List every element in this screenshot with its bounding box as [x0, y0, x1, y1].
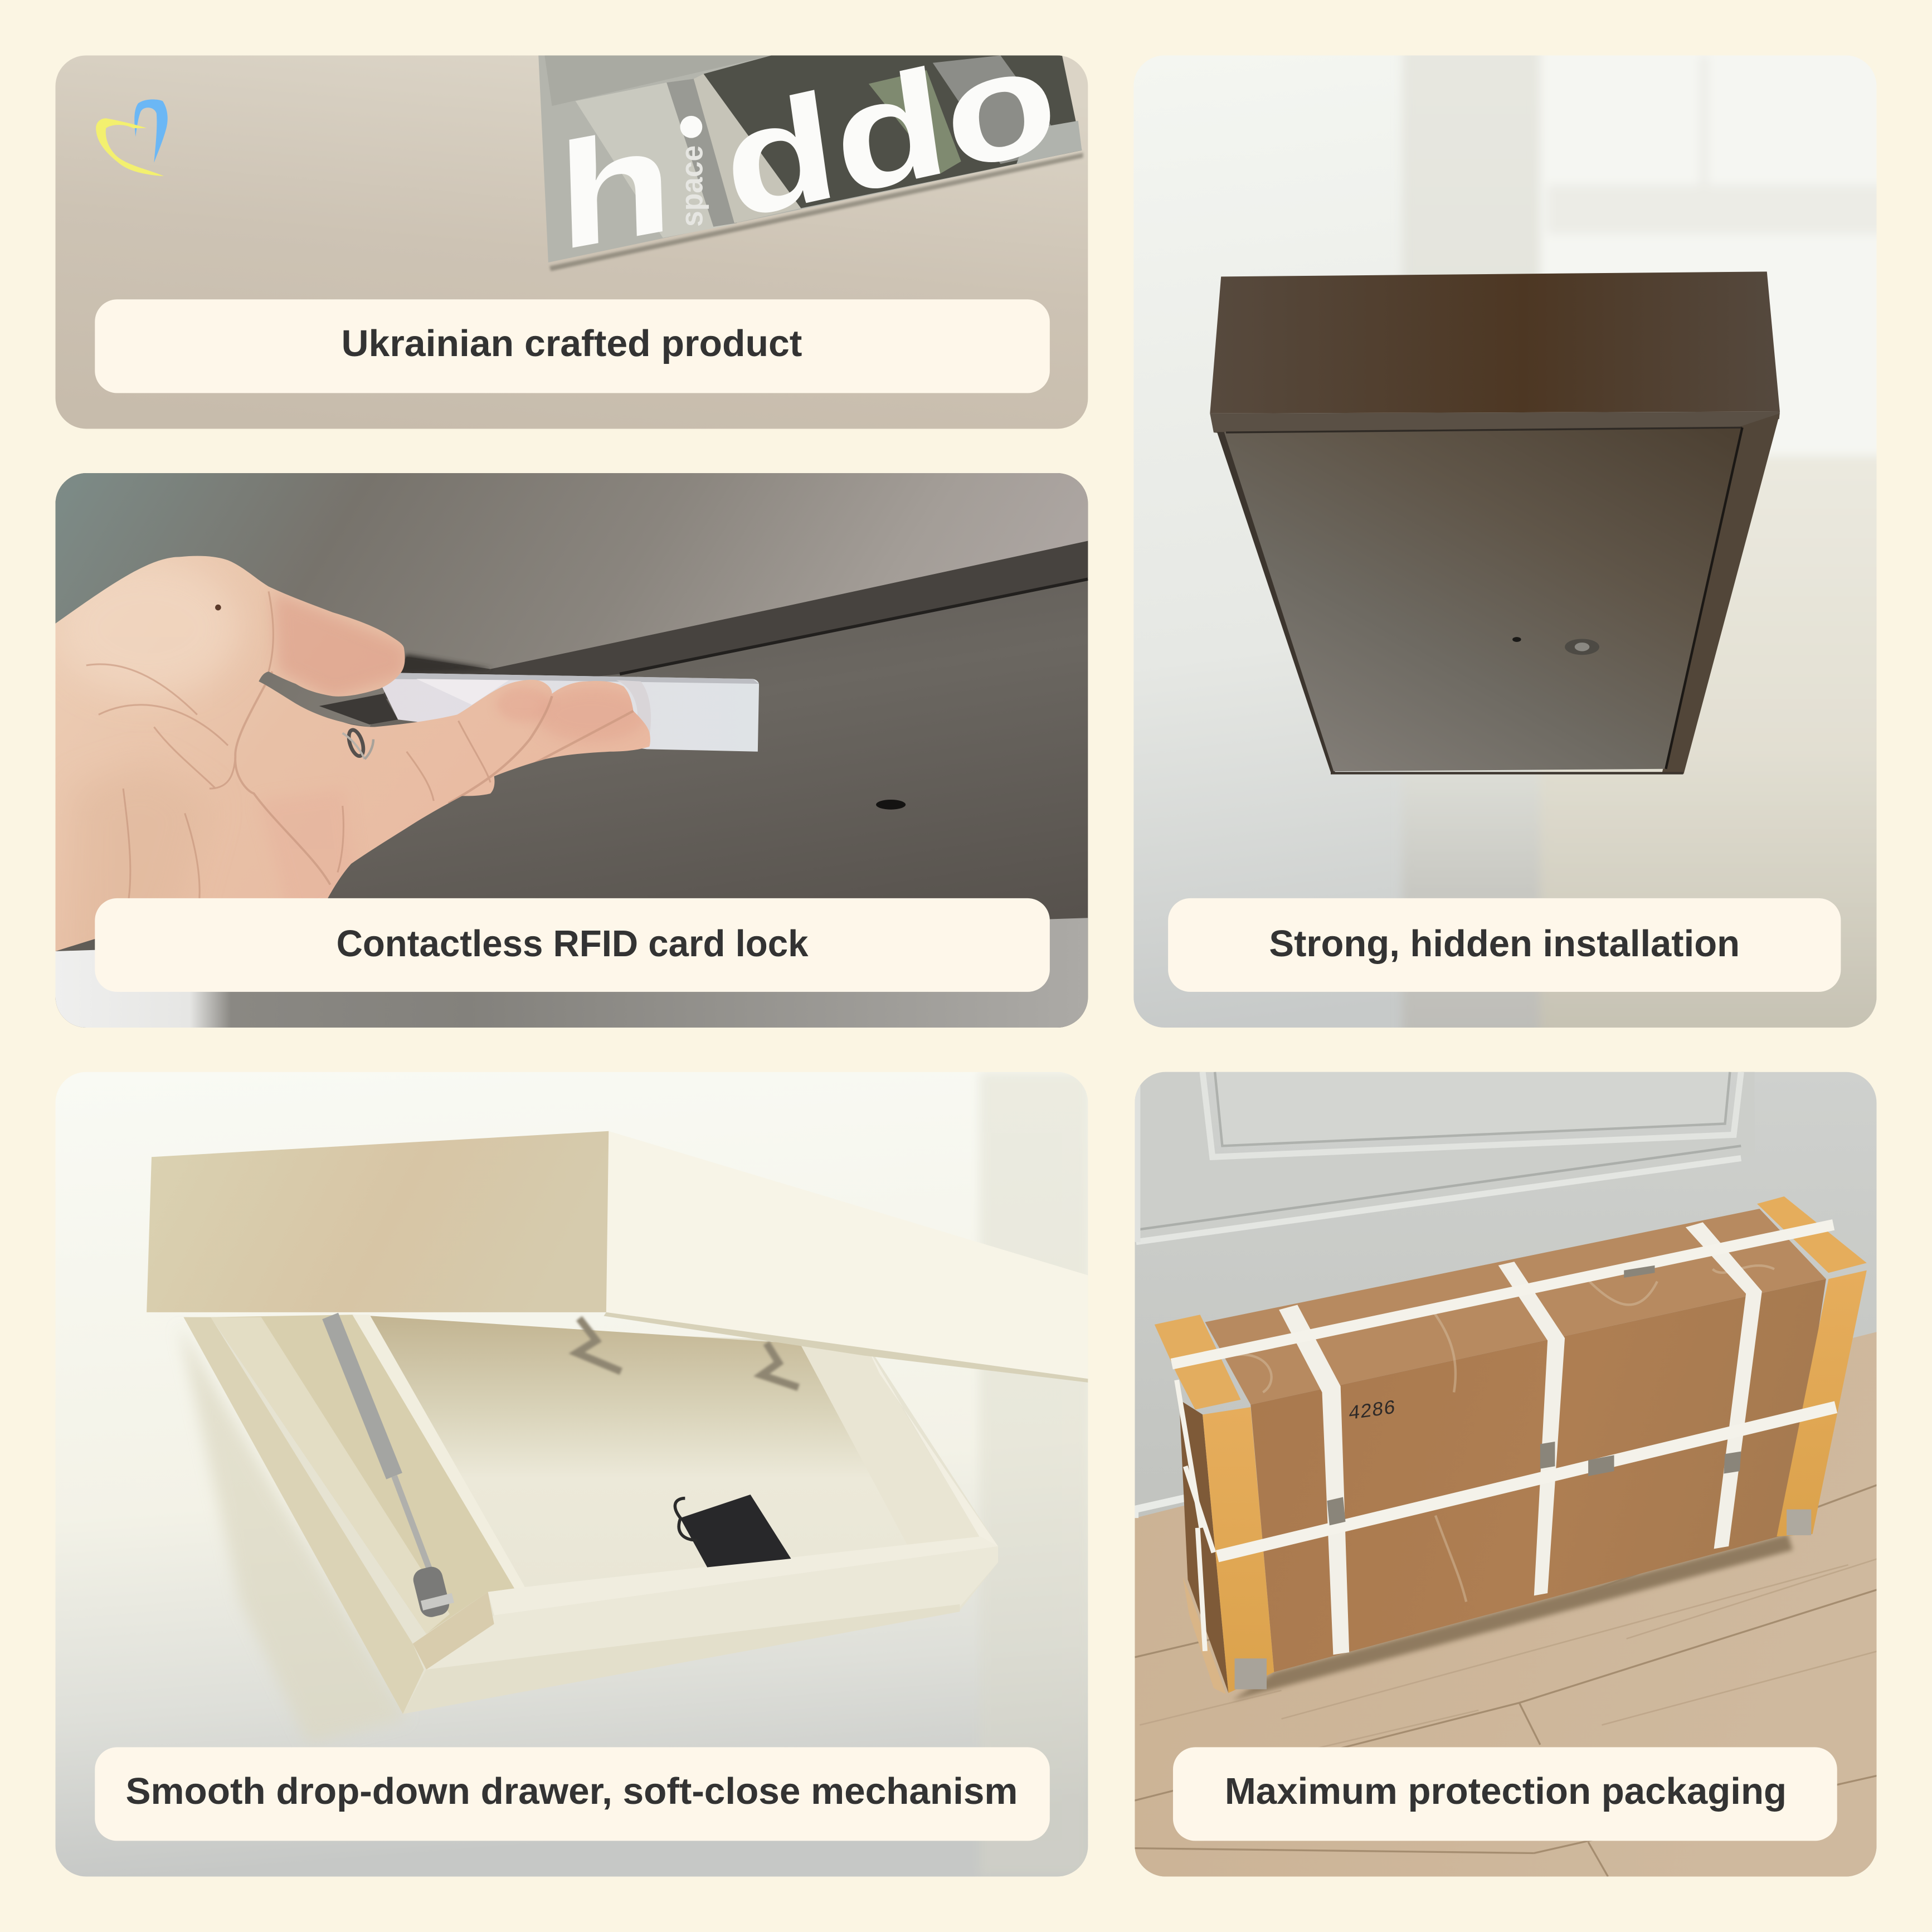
brochure wordmark	[570, 66, 1050, 247]
cabinet edge and slit	[383, 541, 1088, 699]
wall safe cabinet	[1210, 271, 1780, 774]
handwritten number: 4286	[1347, 1397, 1397, 1425]
panel: Strong, hidden installation	[1133, 43, 1897, 1041]
caption pill	[1168, 898, 1841, 992]
icon: Ukrainian heart logo	[96, 99, 168, 176]
wood floor	[1131, 1332, 1878, 1877]
caption pill: Ukrainian crafted product	[341, 323, 802, 364]
plastic card	[377, 673, 759, 752]
brochure wordmark: space	[674, 145, 709, 227]
gas strut	[330, 1316, 454, 1619]
wall shadow	[179, 1325, 407, 1744]
floor below cabinet	[55, 918, 1088, 1028]
ring	[343, 728, 373, 759]
charger	[675, 1495, 791, 1568]
caption pill	[95, 299, 1050, 393]
caption pill: Contactless RFID card lock	[337, 923, 809, 965]
brochure wordmark: h	[556, 95, 675, 282]
blurred room background	[1402, 43, 1897, 1041]
plastic straps	[1279, 1222, 1762, 1655]
caption pill: Strong, hidden installation	[1269, 923, 1740, 965]
panel: Ukrainian crafted product	[56, 56, 1088, 429]
shipping crate	[1155, 1196, 1867, 1700]
caption pill	[95, 1747, 1050, 1841]
brochure wordmark: ddo	[713, 12, 1067, 251]
metal buckles	[1235, 1266, 1811, 1689]
hand	[55, 542, 671, 1010]
caption pill	[95, 898, 1050, 992]
caption pill	[1173, 1747, 1837, 1841]
box front	[1250, 1279, 1826, 1672]
cabinet top box	[147, 1131, 1088, 1383]
lock hole	[876, 800, 906, 810]
brochure	[538, 56, 1084, 272]
panel: Smooth drop-down drawer, soft-close mechanism	[55, 1072, 1091, 1877]
caption pill: Maximum protection packaging	[1225, 1771, 1787, 1812]
open drawer	[183, 1315, 998, 1714]
ceiling surface	[55, 473, 1088, 727]
side	[1179, 1400, 1228, 1693]
door	[1224, 427, 1741, 771]
hinges	[577, 1318, 799, 1388]
wall moulding	[1135, 1072, 1755, 1242]
panel: Maximum protection packaging	[1131, 1072, 1878, 1877]
caption pill: Smooth drop-down drawer, soft-close mechanism	[126, 1771, 1018, 1812]
panel: Contactless RFID card lock	[55, 473, 1088, 1028]
box top	[1205, 1209, 1826, 1405]
wooden battens	[1203, 1407, 1274, 1693]
